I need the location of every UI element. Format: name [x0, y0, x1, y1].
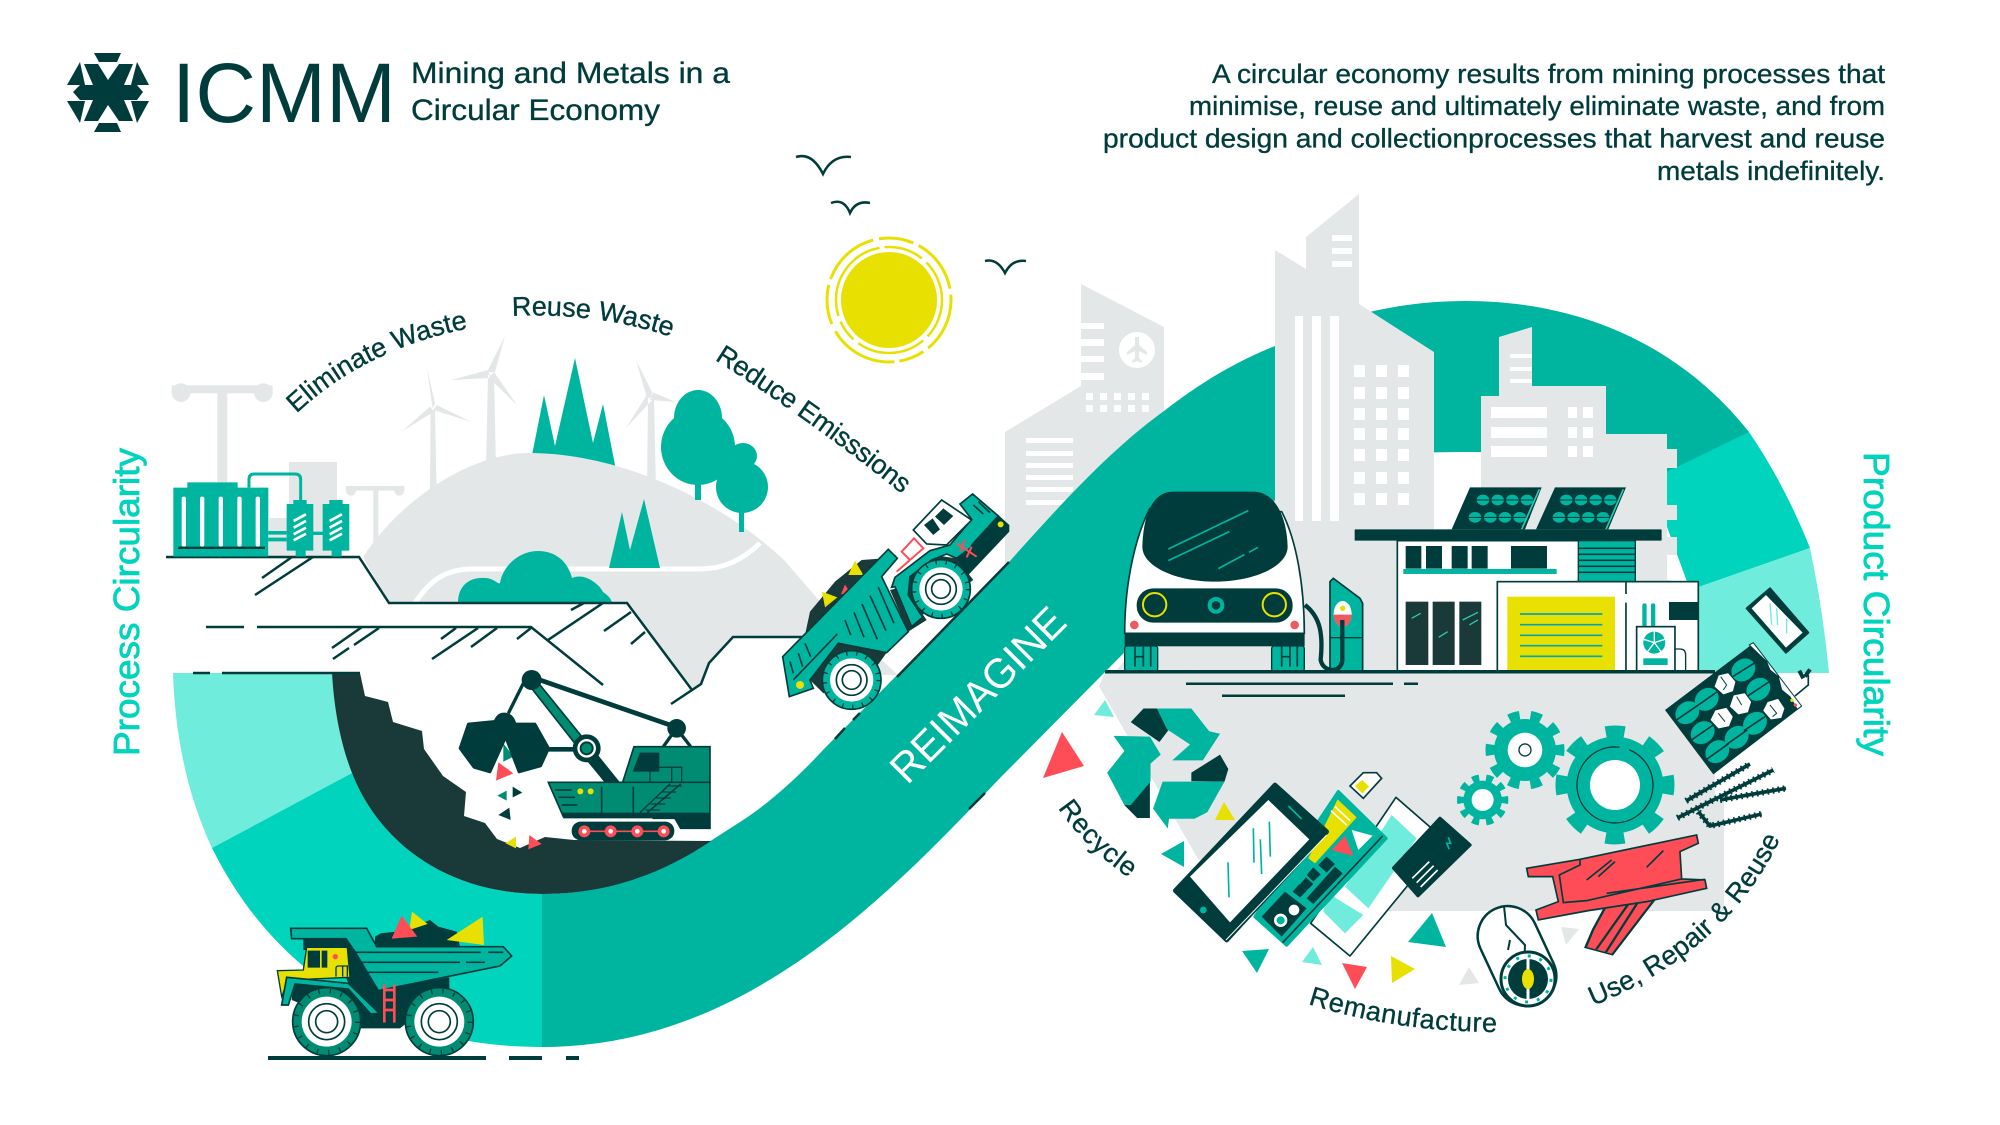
intro paragraph: A circular economy results from mining processes that: [1212, 59, 1886, 89]
tall city building: [1275, 194, 1434, 672]
roof: [1355, 529, 1662, 541]
crawler track: [572, 822, 674, 840]
SIM card: [1350, 773, 1382, 798]
sun: [827, 238, 951, 362]
lower beam: [1586, 901, 1654, 955]
recycling symbol: [1107, 708, 1228, 828]
boom and cables: [508, 670, 691, 783]
side label: Product Circularity: Product Circularity: [1856, 452, 1897, 756]
clamshell bucket: [460, 714, 549, 772]
title: Circular Economy: [411, 94, 660, 127]
bumper and wheels: [1125, 633, 1305, 671]
chassis: [810, 555, 973, 693]
scrap chains: [1677, 764, 1786, 826]
band segment: dark teal main curve: [542, 301, 1749, 1047]
electric car and charger: [1125, 492, 1363, 672]
chassis: [292, 938, 449, 1028]
small cog: [1460, 778, 1505, 822]
plant: tanks and pipes: [166, 474, 360, 557]
hill with forest and mining terrain: [363, 358, 898, 690]
phone, circuit board and chains: [1665, 588, 1810, 826]
dump bed: [291, 928, 512, 991]
road lines: [1105, 672, 1715, 696]
white gap between buildings: [1434, 452, 1481, 672]
small trees on hill: [609, 499, 660, 568]
band segment: medium teal: [212, 773, 542, 1047]
terrain outline strokes: [166, 557, 1009, 809]
wind turbine 1: [402, 367, 471, 493]
recycled fragment triangles: [1043, 700, 1579, 989]
haul truck on band: [277, 912, 512, 1056]
truck climbing the band: [783, 494, 1009, 709]
machine body: [548, 747, 710, 828]
smartphone large: [1175, 785, 1327, 940]
curved label: Eliminate Waste: Eliminate Waste: [286, 315, 466, 412]
house with solar panels: [1355, 487, 1698, 672]
dark mining pit: [332, 673, 711, 894]
damaged circuit board: [1665, 643, 1810, 774]
main walls: [1397, 541, 1579, 672]
ore load: [805, 555, 897, 635]
grille and lights: [1130, 588, 1299, 629]
intro paragraph: minimise, reuse and ultimately eliminate waste, and from: [1189, 91, 1885, 121]
curved label: Reuse Waste: Reuse Waste: [514, 296, 673, 336]
steel I-beams: [1527, 835, 1707, 955]
background: mine site silhouettes: [172, 336, 676, 557]
louvres: [1578, 541, 1635, 582]
car body: [1125, 508, 1304, 633]
cab and hood: [892, 494, 1004, 627]
background city building with airport sign: [1005, 284, 1400, 690]
large trees: [661, 390, 768, 532]
wind turbine 3: [626, 360, 676, 490]
solar panels: [1452, 487, 1626, 529]
bush: [458, 551, 612, 603]
large cog: [1562, 732, 1668, 838]
ladders: [897, 538, 977, 572]
side label: Process Circularity: Process Circularity: [106, 448, 147, 756]
right city building: [1481, 327, 1677, 672]
birds: [796, 156, 1026, 273]
intro paragraph: metals indefinitely.: [1657, 156, 1885, 186]
curved label: Reduce Emissions: Reduce Emisssions: [716, 345, 909, 492]
wheel right: [405, 988, 473, 1056]
plant block: [269, 462, 337, 557]
wheel front: [912, 560, 970, 618]
label: REIMAGINE: REIMAGINE: [881, 598, 1075, 792]
band segment: right light teal: [1690, 548, 1829, 673]
infinity band: [173, 301, 1829, 1047]
circuit control card: [1255, 792, 1386, 945]
fender: [282, 977, 379, 1014]
road on hill: [415, 543, 760, 603]
light pole large: [172, 383, 273, 487]
wheel rear: [822, 651, 881, 709]
road line under haul truck: [268, 1056, 579, 1060]
windscreen: [1142, 492, 1288, 582]
glass doors: [1406, 602, 1481, 665]
upper beam: [1527, 835, 1707, 920]
medium cog: [1490, 715, 1560, 785]
ore load: [375, 912, 484, 947]
heat pump: [1637, 603, 1686, 672]
curved label: Recycle: Recycle: [1058, 798, 1134, 876]
wind turbine 2: [451, 336, 517, 470]
garage block: [1497, 582, 1698, 672]
band segment: light teal: [173, 673, 352, 848]
title: Mining and Metals in a: [411, 57, 730, 90]
curved label: Remanufacture: Remanufacture: [1310, 986, 1496, 1032]
white tablet device: [1311, 797, 1445, 956]
intro paragraph: product design and collectionprocesses that harvest and reuse: [1103, 124, 1885, 154]
wheel left: [293, 988, 361, 1056]
intro paragraph: [1103, 59, 1886, 186]
garage door: [1507, 597, 1615, 672]
falling ore triangles: [496, 743, 542, 849]
forest on the hill top: [531, 358, 616, 470]
dark data card: [1394, 818, 1470, 896]
ladder: [384, 984, 394, 1023]
title: [411, 57, 730, 127]
cab: [277, 947, 350, 997]
small phone: [1747, 588, 1808, 653]
grey product ground: [1099, 672, 1724, 911]
curved label: Use, Repair & Reuse: Use, Repair & Reuse: [1588, 835, 1778, 1004]
light pole small: [346, 486, 404, 545]
computer mouse: [1468, 896, 1566, 1016]
charger: [1305, 578, 1363, 672]
logo wordmark: ICMM: [172, 46, 396, 140]
upper windows: [1406, 546, 1547, 569]
electric shovel excavator: [460, 670, 710, 849]
dump bed: [783, 549, 908, 697]
band segment: right medium teal: [1650, 432, 1810, 590]
logo mark: [67, 53, 149, 132]
grey hill: [363, 453, 898, 690]
cogs: [1460, 715, 1668, 838]
